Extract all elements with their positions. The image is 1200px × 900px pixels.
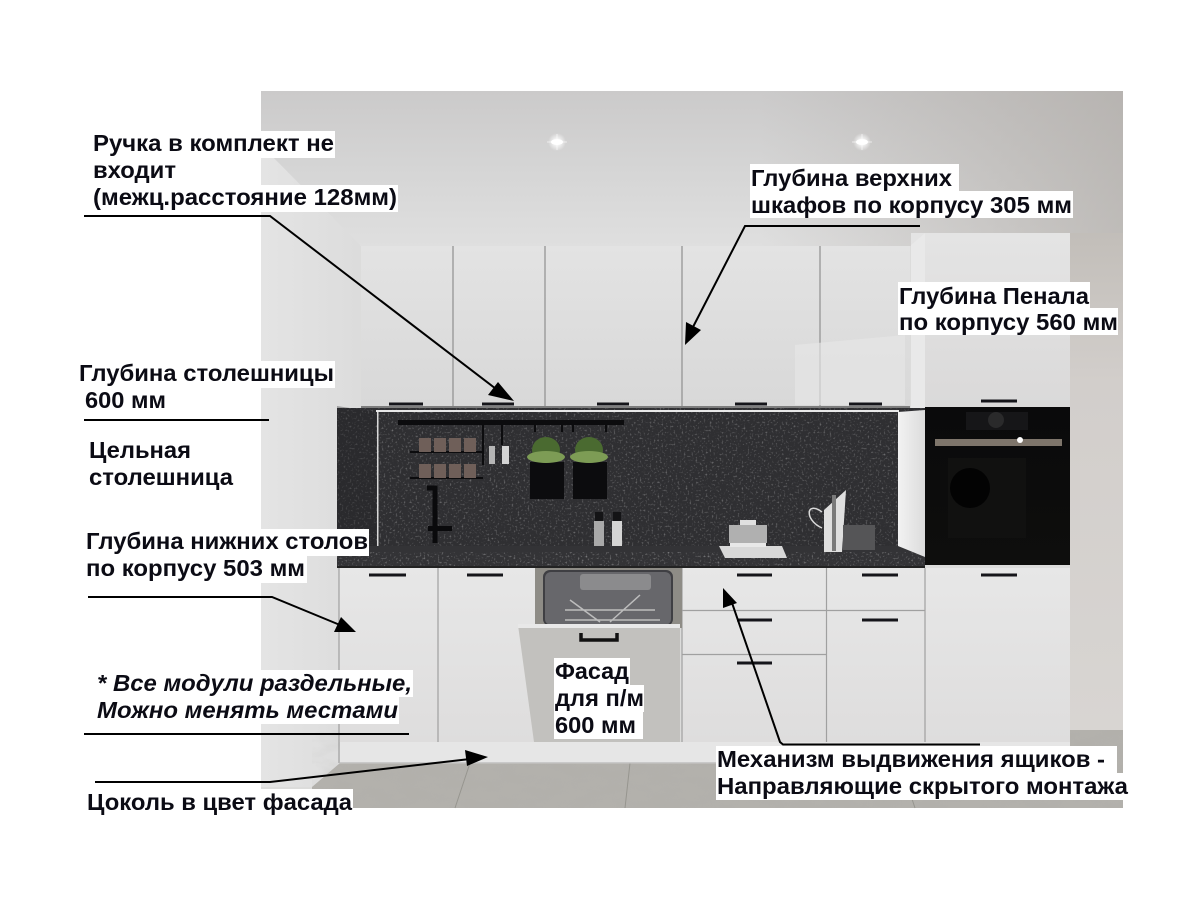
label: upper cabinet depth: шкафов по корпусу 305 мм <box>751 192 1072 218</box>
label: dishwasher facade: 600 мм <box>555 712 636 738</box>
label: countertop depth: 600 мм <box>85 387 166 413</box>
label: tall cabinet depth: по корпусу 560 мм <box>899 309 1118 335</box>
label: handle: (межц.расстояние 128мм) <box>93 184 397 210</box>
label: plinth: Цоколь в цвет фасада <box>87 789 352 815</box>
jug and bowl <box>809 490 875 552</box>
faucet and sink <box>372 488 546 555</box>
label: tall cabinet depth <box>898 282 1118 335</box>
arrow: drawer mechanism <box>723 588 980 744</box>
dishwasher <box>518 568 682 742</box>
label: modules note: Можно менять местами <box>97 697 398 723</box>
label: modules note: * Все модули раздельные, <box>97 670 412 696</box>
arrow: handle note <box>84 216 514 401</box>
label: drawer mechanism: Механизм выдвижения ящиков - <box>717 746 1105 772</box>
label: dishwasher facade: Фасад <box>555 658 629 684</box>
label: handle: Ручка в комплект не <box>93 130 334 156</box>
utensil rail <box>398 420 624 465</box>
arrow: plinth <box>95 750 488 782</box>
label: lower cabinet depth: Глубина нижних столов <box>86 528 368 554</box>
label: solid countertop: столешница <box>89 464 233 490</box>
label: modules note <box>96 670 413 724</box>
label: lower cabinet depth: по корпусу 503 мм <box>86 555 305 581</box>
label: drawer mechanism: Направляющие скрытого монтажа <box>717 773 1128 799</box>
upper cabinets <box>361 246 910 409</box>
label: tall cabinet depth: Глубина Пенала <box>899 283 1089 309</box>
bottles <box>594 512 622 546</box>
spice shelves <box>410 438 509 478</box>
label: handle: входит <box>93 157 176 183</box>
hanging plants <box>527 437 608 499</box>
label: upper cabinet depth: Глубина верхних <box>751 165 952 191</box>
oven <box>925 407 1070 565</box>
label: dishwasher facade: для п/м <box>555 685 644 711</box>
countertop <box>337 546 925 568</box>
underline: modules note <box>84 733 409 735</box>
pot on tray <box>719 520 787 558</box>
backsplash <box>337 406 927 560</box>
label: upper cabinet depth <box>750 164 1073 218</box>
arrow: lower cabinet depth <box>88 597 356 632</box>
ceiling spotlights <box>547 133 872 151</box>
tall cabinet <box>911 233 1070 408</box>
label: countertop depth <box>78 360 335 415</box>
label: drawer mechanism <box>716 746 1129 800</box>
lower cabinets <box>339 568 1070 763</box>
label: countertop depth: Глубина столешницы <box>79 360 334 386</box>
plinth <box>340 742 1070 764</box>
label: lower cabinet depth <box>85 528 369 583</box>
floor <box>312 730 1123 808</box>
room: ceiling and walls <box>261 91 1123 808</box>
label: solid countertop <box>89 437 233 490</box>
kitchen scene <box>261 91 1123 808</box>
label: solid countertop: Цельная <box>89 437 191 463</box>
label: handle <box>92 130 398 212</box>
label: dishwasher facade <box>554 658 644 739</box>
underline: countertop depth <box>84 419 269 421</box>
arrow: upper cabinet depth <box>685 226 920 345</box>
